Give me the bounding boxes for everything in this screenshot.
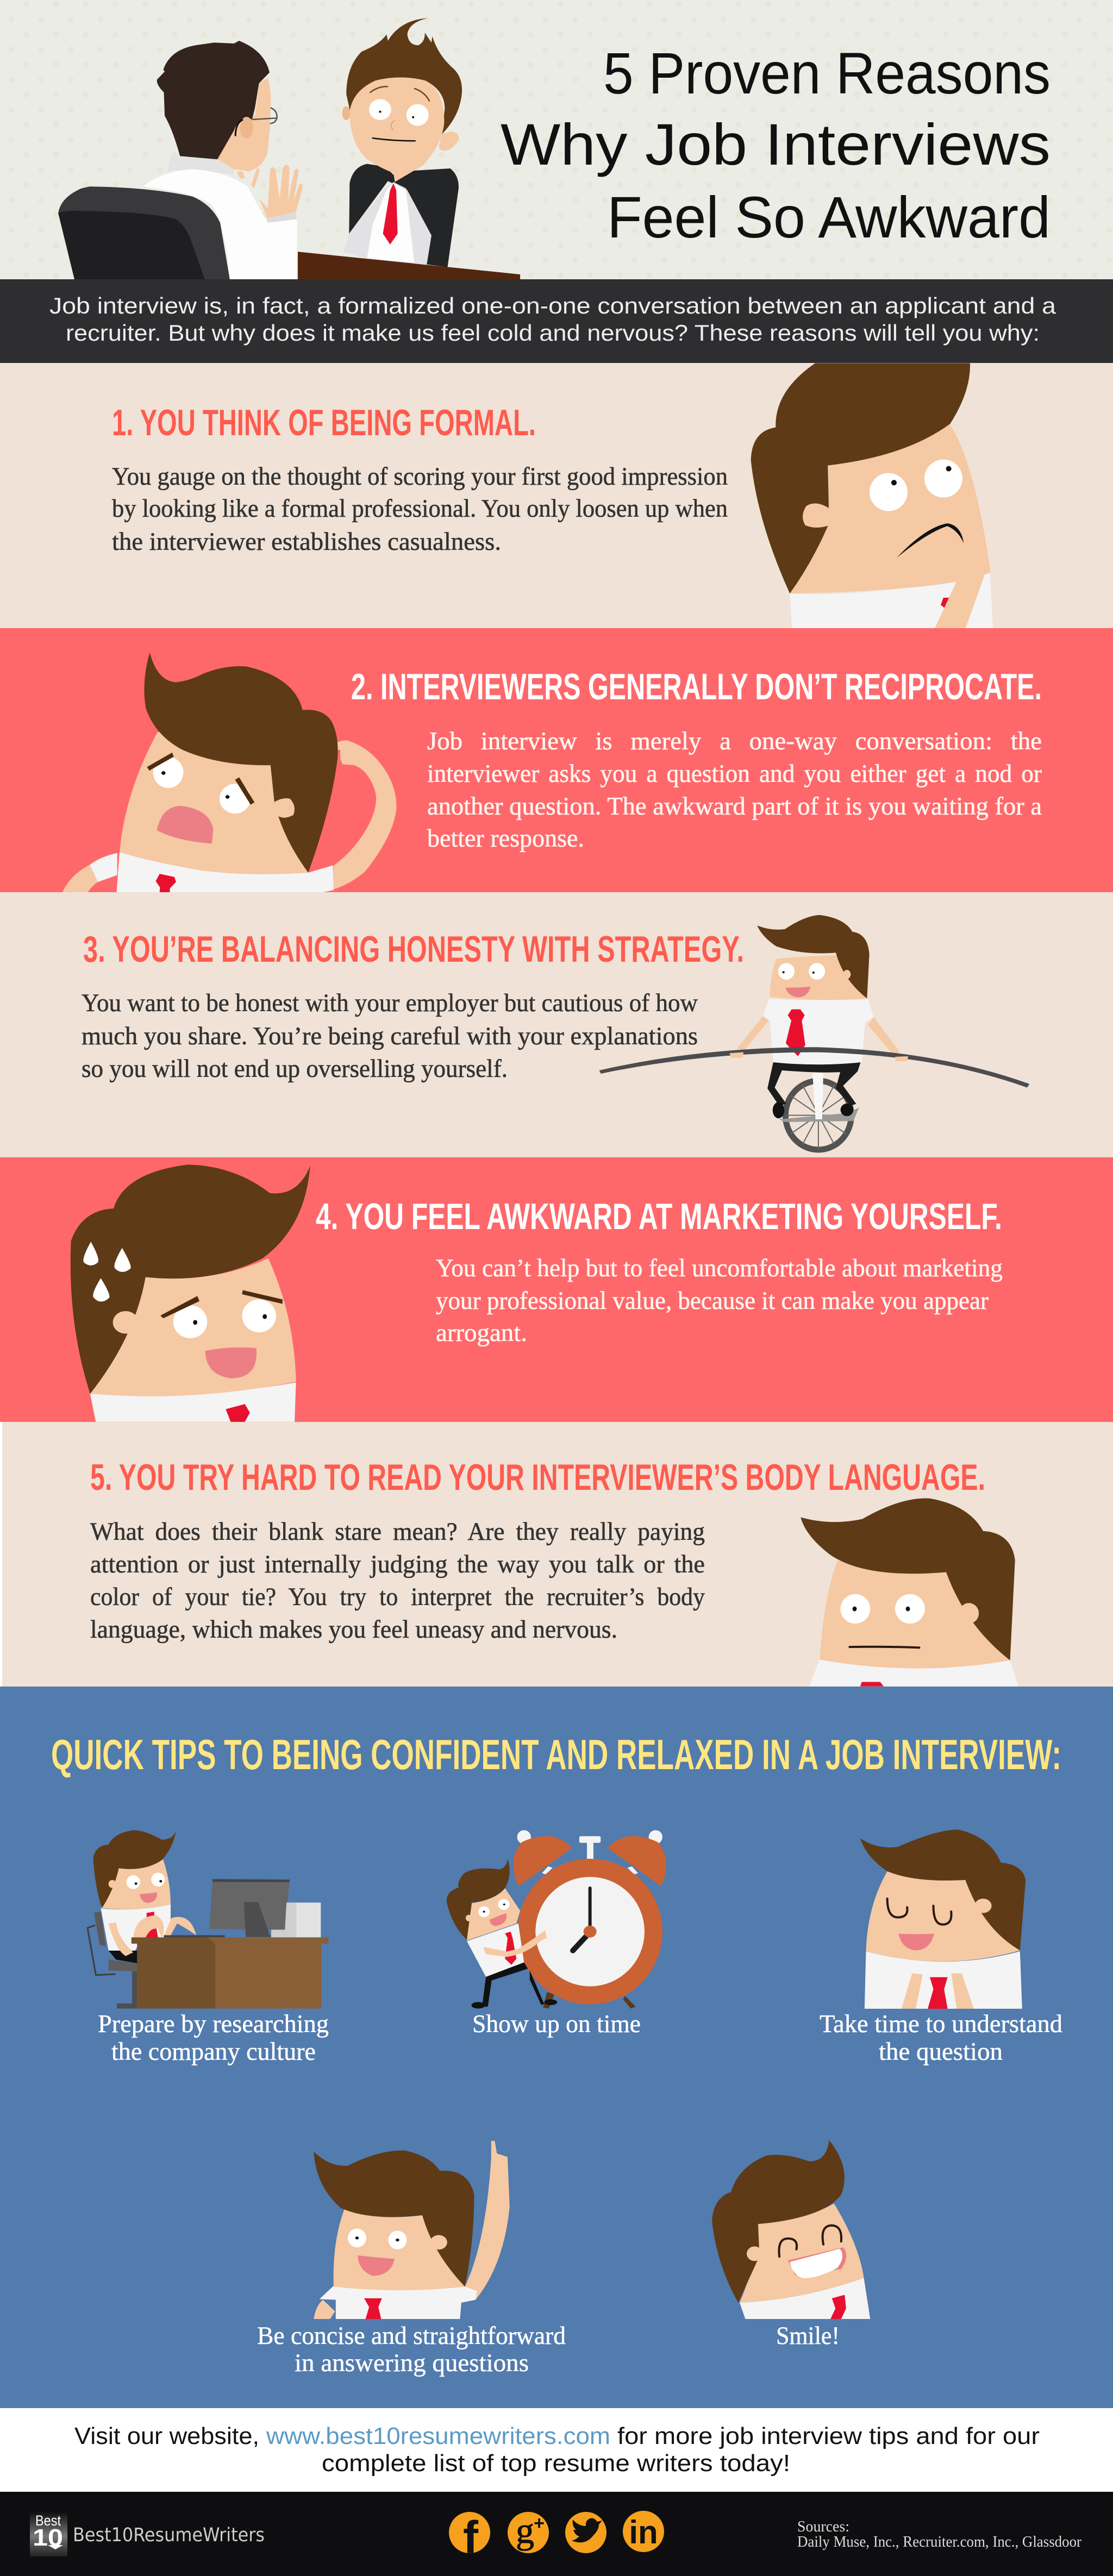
text: reason 5 [90,1518,705,1644]
text: reason 2: another question. The awkward part of it is you waiting for a [427,792,1042,820]
text: reason 3: You want to be honest with your employer but cautious of how [82,989,698,1017]
tip: alarm clock: Show up on time [472,2010,641,2038]
text: reason 2: better response. [427,824,584,853]
heading: reason 3: 3. YOU’RE BALANCING HONESTY WITH STRATEGY. [83,929,744,970]
tip: research at desk: the company culture [111,2038,316,2066]
panel: footer [0,2492,1113,2576]
text: sources: Sources: [797,2518,849,2535]
illustration: sweating face [71,1164,310,1422]
heading: reason 1: 1. YOU THINK OF BEING FORMAL. [112,402,536,443]
text: reason 1: You gauge on the thought of scoring your first good impression [112,462,728,491]
text: reason 5: color of your tie? You try to interpret the recruiter’s body [90,1583,705,1611]
title: 5 Proven Reasons [603,40,1051,106]
panel: reason 3 [0,892,1113,1157]
text: reason 4: You can’t help but to feel uncomfortable about marketing [436,1254,1003,1282]
tip: alarm clock [447,1830,666,2038]
illustration: man balancing on unicycle [599,915,1029,1150]
text: reason 1 [112,462,728,556]
tip: raised hand: in answering questions [295,2349,529,2377]
tip: smile: Smile! [776,2322,840,2350]
icons: social media: + [534,2513,545,2534]
panel: header [0,0,1113,280]
illustration: interviewer and applicant [58,18,520,280]
illustration: confused face [62,653,396,893]
text: reason 2: interviewer asks you a question and you either get a nod or [427,760,1042,788]
panel: call to action: for more job interview tips and for our [617,2423,1040,2449]
panel: call to action: Visit our website, [74,2423,259,2449]
illustration: thinking face [751,363,993,629]
text: reason 5: language, which makes you feel uneasy and nervous. [90,1615,617,1644]
title: Feel So Awkward [607,184,1051,250]
text: reason 4: your professional value, because it can make you appear [436,1287,989,1315]
title: Why Job Interviews [501,111,1051,177]
logo: Best10ResumeWriters [73,2524,265,2546]
panel: call to action: complete list of top resume writers today! [322,2450,790,2477]
icons: social media: in [629,2514,658,2550]
title [501,40,1051,250]
panel: reason 5 [0,1422,1113,1687]
panel: intro bar [0,279,1113,363]
icons: social media: f [463,2512,479,2563]
text: reason 2: Job interview is merely a one-way conversation: the [427,727,1042,755]
logo: Best [35,2512,61,2529]
panel: reason 1 [0,363,1113,629]
text: sources [797,2518,1082,2550]
text: reason 1: by looking like a formal professional. You only loosen up when [112,494,728,523]
panel: call to action [0,2408,1113,2492]
illustration: blank stare face [801,1498,1018,1687]
text: reason 4 [436,1254,1003,1347]
text: reason 4: arrogant. [436,1319,527,1347]
tip: research at desk: Prepare by researching [98,2010,329,2038]
tip: research at desk [87,1830,329,2066]
text: reason 1: the interviewer establishes casualness. [112,528,501,556]
panel: reason 2 [0,628,1113,893]
text: reason 2 [427,727,1042,853]
text: reason 5: attention or just internally judging the way you talk or the [90,1550,705,1578]
text: sources: Daily Muse, Inc., Recruiter.com, Inc., Glassdoor [797,2534,1082,2550]
panel: quick tips [0,1687,1113,2408]
tip: raised hand [257,2141,566,2377]
panel: intro bar: recruiter. But why does it make us feel cold and nervous? These reasons will tell you why: [66,320,1040,346]
panel: intro bar: Job interview is, in fact, a formalized one-on-one conversation between an applicant and a [49,293,1056,318]
text: reason 3: so you will not end up overselling yourself. [82,1055,508,1083]
text: reason 3 [82,989,698,1083]
tip: raised hand: Be concise and straightforward [257,2322,566,2350]
text: reason 5: What does their blank stare mean? Are they really paying [90,1518,705,1546]
tip: calm face: Take time to understand [820,2010,1062,2038]
logo: 10 [33,2524,63,2551]
tip: calm face [820,1829,1062,2066]
icons: social media: g [516,2510,534,2551]
tip: smile [712,2140,870,2350]
icons: social media [449,2510,664,2563]
panel: call to action: www.best10resumewriters.com [266,2423,610,2449]
panel: reason 4 [0,1157,1113,1422]
tip: calm face: the question [879,2038,1003,2066]
logo [30,2511,265,2556]
text: reason 3: much you share. You’re being careful with your explanations [82,1022,698,1050]
